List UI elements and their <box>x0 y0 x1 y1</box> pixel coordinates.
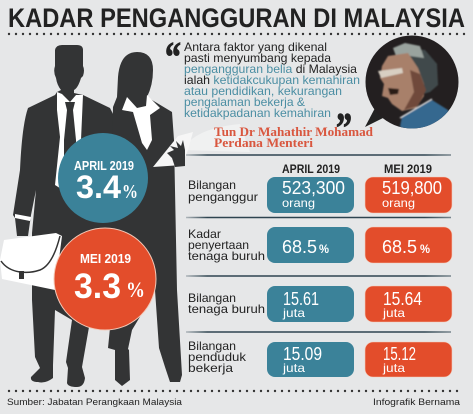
row: Bilangan penganggur: orang <box>382 196 415 210</box>
row: Bilangan penduduk bekerja: 15.12 <box>383 344 416 364</box>
callout: Mei 2019 rate <box>54 228 156 330</box>
icon: briefcase <box>0 233 62 290</box>
quote text: atau pendidikan, kekurangan <box>184 84 342 98</box>
callout: April 2019 rate: % <box>122 181 138 203</box>
table column headers: MEI 2019 <box>384 164 432 176</box>
row: Bilangan penganggur: orang <box>282 196 315 210</box>
attribution: Perdana Menteri <box>214 135 313 150</box>
illustration: businesswoman silhouette <box>108 52 193 386</box>
row: Bilangan tenaga buruh <box>188 286 452 322</box>
row: Bilangan tenaga buruh: Bilangan <box>188 291 236 305</box>
row: Bilangan penduduk bekerja: juta <box>382 361 405 375</box>
row: Bilangan tenaga buruh: 15.61 <box>283 289 319 309</box>
row: Bilangan penduduk bekerja: Bilangan <box>188 339 236 353</box>
row: Bilangan penganggur: penganggur <box>188 190 258 204</box>
row: Kadar penyertaan tenaga buruh: % <box>319 242 329 256</box>
row: Bilangan tenaga buruh: juta <box>282 306 305 320</box>
table column headers: APRIL 2019 <box>282 164 340 176</box>
quote text: ialah ketidakcukupan kemahiran <box>184 73 360 87</box>
row: Bilangan tenaga buruh: 15.64 <box>383 289 422 309</box>
callout: April 2019 rate <box>58 133 148 223</box>
row: Kadar penyertaan tenaga buruh: 68.5 <box>282 237 317 257</box>
row: Kadar penyertaan tenaga buruh: Kadar <box>188 227 221 241</box>
callout: April 2019 rate: 3.4 <box>76 169 121 205</box>
row: Bilangan penduduk bekerja: bekerja <box>188 361 233 375</box>
table column headers <box>282 164 432 176</box>
row: Bilangan penduduk bekerja: penduduk <box>188 350 247 364</box>
callout: Mei 2019 rate: 3.3 <box>74 267 121 306</box>
quote text: Antara faktor yang dikenal <box>184 40 327 54</box>
row: Kadar penyertaan tenaga buruh: penyertaan <box>188 238 249 252</box>
callout: Mei 2019 rate: % <box>126 277 145 302</box>
row: Bilangan penduduk bekerja: 15.09 <box>283 344 322 364</box>
credit: Infografik Bernama <box>373 397 461 408</box>
illustration: businessman silhouette <box>13 45 116 387</box>
callout: April 2019 rate: APRIL 2019 <box>74 158 134 173</box>
row: Kadar penyertaan tenaga buruh: % <box>420 242 430 256</box>
row: Kadar penyertaan tenaga buruh: 68.5 <box>382 237 417 257</box>
row: Bilangan penganggur: 519,800 <box>382 178 442 198</box>
source: Sumber: Jabatan Perangkaan Malaysia <box>7 397 183 408</box>
row: Bilangan penganggur: 523,300 <box>282 178 345 198</box>
quote text <box>184 40 360 120</box>
row: Kadar penyertaan tenaga buruh: tenaga buruh <box>188 249 265 263</box>
icon: opening quote mark: “ <box>165 35 181 81</box>
quote text: pasti menyumbang kepada <box>184 51 331 65</box>
row: Bilangan tenaga buruh: juta <box>382 306 405 320</box>
portrait: Tun Dr Mahathir <box>365 36 458 132</box>
quote text: ketidakpadanan kemahiran <box>184 106 331 120</box>
icon: closing quote mark: ” <box>336 106 352 152</box>
callout: Mei 2019 rate: MEI 2019 <box>80 251 131 266</box>
row: Kadar penyertaan tenaga buruh <box>188 227 452 263</box>
attribution: Tun Dr Mahathir Mohamad <box>214 124 374 139</box>
quote text: pengangguran belia di Malaysia <box>184 62 357 76</box>
row: Bilangan penduduk bekerja <box>188 339 452 377</box>
quote text: pengalaman bekerja & <box>184 95 305 109</box>
row: Bilangan penganggur <box>188 177 452 213</box>
row: Bilangan penganggur: Bilangan <box>188 178 236 192</box>
attribution <box>214 124 374 150</box>
row: Bilangan penduduk bekerja: juta <box>282 361 305 375</box>
row: Bilangan tenaga buruh: tenaga buruh <box>188 302 265 316</box>
